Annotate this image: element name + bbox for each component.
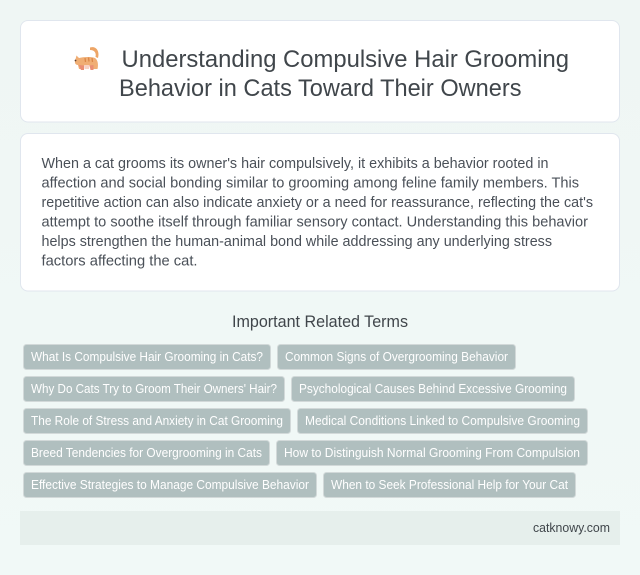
panel: title card	[20, 20, 620, 122]
description text: factors affecting the cat.	[42, 254, 198, 270]
chip	[324, 472, 576, 498]
chip	[24, 344, 270, 370]
chip: The Role of Stress and Anxiety in Cat Grooming	[31, 414, 283, 428]
heading: related terms: Important Related Terms	[232, 313, 408, 331]
footer site name: catknowy.com	[533, 520, 610, 535]
chip	[24, 376, 284, 402]
chip	[24, 408, 290, 434]
icon: cat	[75, 47, 99, 70]
chip: Breed Tendencies for Overgrooming in Cats	[31, 446, 262, 460]
description text: repetitive action can also indicate anxiety or a need for reassurance, reflecting the cat's	[42, 195, 593, 211]
chip: Psychological Causes Behind Excessive Grooming	[299, 382, 567, 396]
chip	[278, 344, 516, 370]
description text: affection and social bonding similar to grooming among feline family members. This	[42, 176, 579, 192]
chip: How to Distinguish Normal Grooming From Compulsion	[284, 446, 580, 460]
description text: When a cat grooms its owner's hair compulsively, it exhibits a behavior rooted in	[42, 156, 548, 172]
chip	[24, 472, 316, 498]
chip	[24, 440, 270, 466]
chip: When to Seek Professional Help for Your Cat	[331, 478, 568, 492]
description text: helps strengthen the human-animal bond while addressing any underlying stress	[42, 234, 552, 250]
panel: description	[20, 134, 620, 291]
chip: Common Signs of Overgrooming Behavior	[285, 350, 508, 364]
chip: Medical Conditions Linked to Compulsive Grooming	[305, 414, 580, 428]
description text	[42, 156, 593, 270]
chip	[292, 376, 574, 402]
chip	[298, 408, 588, 434]
panel: related term chips	[24, 344, 588, 498]
chip: Effective Strategies to Manage Compulsive Behavior	[31, 478, 309, 492]
title line 1: Understanding Compulsive Hair Grooming	[122, 46, 569, 73]
title line 2: Behavior in Cats Toward Their Owners	[119, 75, 522, 102]
description text: attempt to soothe itself through familiar sensory contact. Understanding this behavior	[42, 214, 588, 230]
chip: Why Do Cats Try to Groom Their Owners' Hair?	[31, 382, 277, 396]
chip	[276, 440, 588, 466]
chip: What Is Compulsive Hair Grooming in Cats?	[31, 350, 263, 364]
footer	[20, 511, 620, 545]
